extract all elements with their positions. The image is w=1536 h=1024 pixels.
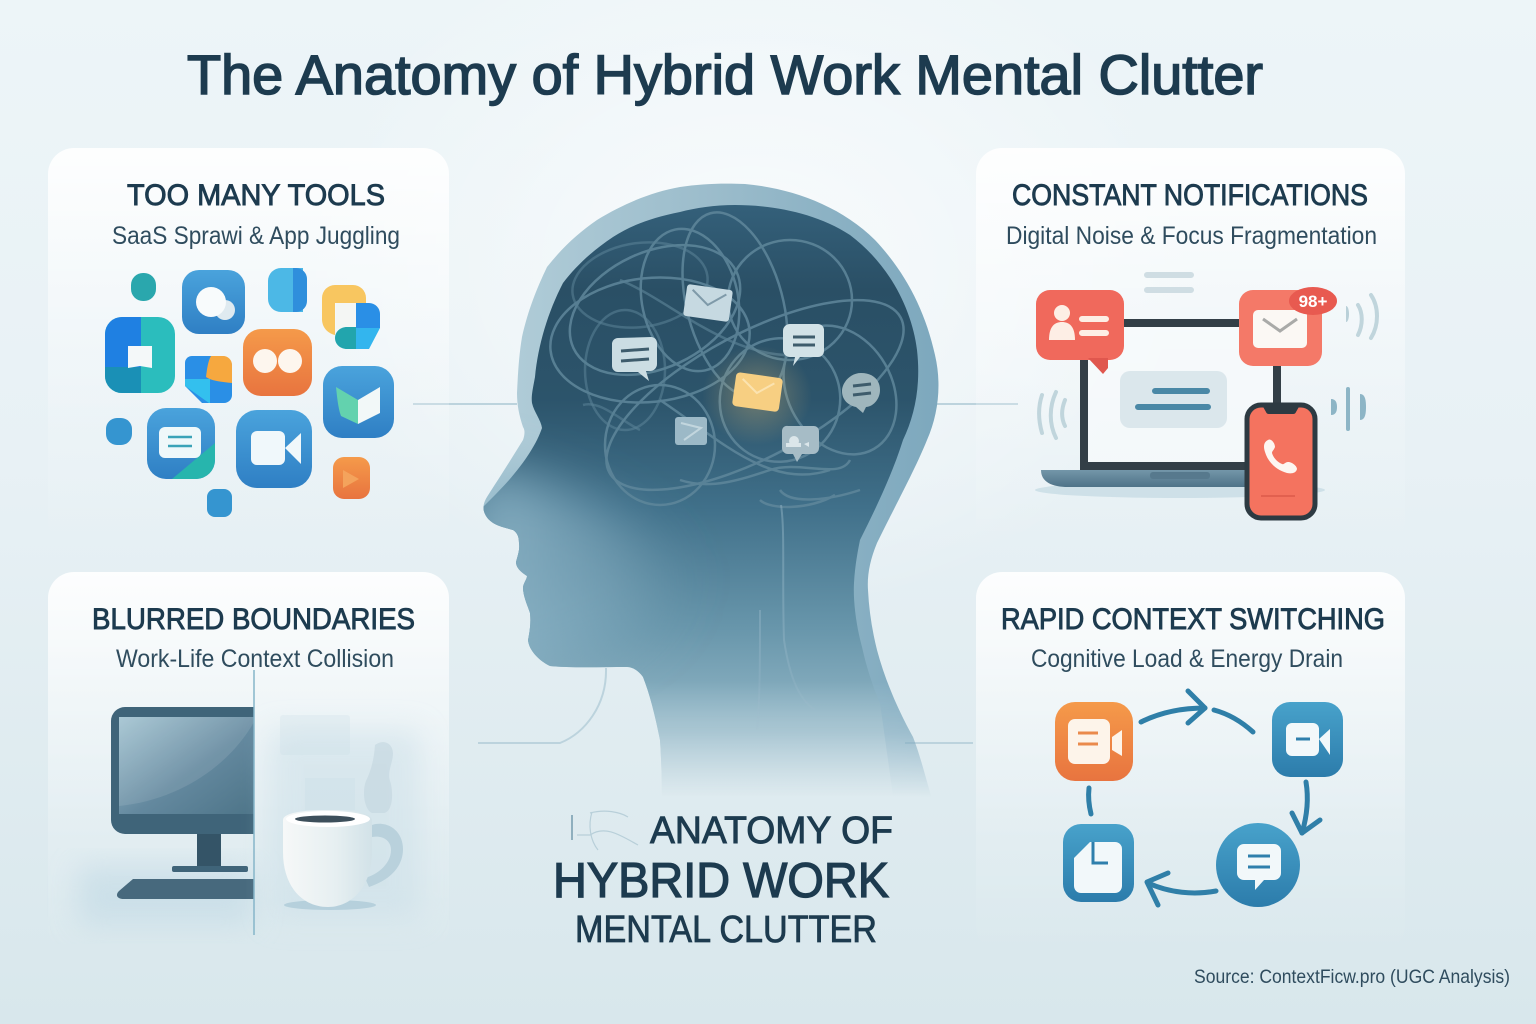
illustration: monitor and keyboard — [78, 707, 254, 926]
illustration: laptop and notifications: 98+ — [1299, 292, 1327, 311]
connector lines — [413, 404, 1018, 743]
source note: Source: ContextFicw.pro (UGC Analysis) — [1194, 966, 1510, 988]
brain glow — [702, 345, 812, 445]
panel: rapid context switching — [976, 572, 1405, 952]
icon: highlighted envelope — [732, 372, 783, 412]
tangled lines — [549, 211, 905, 508]
icon: round chat — [842, 373, 880, 413]
heading: blurred boundaries: BLURRED BOUNDARIES — [92, 603, 415, 636]
heading: too many tools: TOO MANY TOOLS — [127, 179, 385, 212]
title: The Anatomy of Hybrid Work Mental Clutter — [187, 43, 1263, 106]
caption line: anatomy of: ANATOMY OF — [650, 810, 893, 852]
head interior — [470, 205, 918, 810]
faint sketch marks — [572, 811, 638, 850]
subtitle: cognitive load: Cognitive Load & Energy Drain — [1031, 645, 1343, 673]
head silhouette — [484, 184, 938, 790]
heading: rapid context switching: RAPID CONTEXT SWITCHING — [1001, 603, 1385, 636]
icon: chat left — [612, 337, 657, 381]
face shading — [484, 450, 662, 666]
icon: chat bottom — [782, 426, 819, 462]
subtitle: digital noise: Digital Noise & Focus Fragmentation — [1006, 222, 1377, 250]
divider: work-life split — [253, 670, 255, 935]
icon: chat right — [783, 324, 824, 366]
center caption — [553, 810, 893, 951]
subtitle: work-life: Work-Life Context Collision — [116, 645, 394, 673]
head rim — [484, 184, 938, 790]
caption line: mental clutter: MENTAL CLUTTER — [575, 909, 877, 951]
panel: blurred boundaries — [48, 572, 449, 952]
panel: too many tools — [48, 148, 449, 548]
icon: send — [675, 417, 707, 445]
neck nerves — [759, 505, 794, 682]
subtitle: saas sprawl: SaaS Sprawi & App Juggling — [112, 222, 400, 250]
illustration: laptop and notifications — [1035, 275, 1377, 518]
panel: constant notifications — [976, 148, 1405, 548]
heading: constant notifications: CONSTANT NOTIFICATIONS — [1012, 179, 1368, 212]
icon: envelope top — [683, 284, 733, 322]
caption line: hybrid work: HYBRID WORK — [553, 854, 889, 908]
illustration: coffee mug — [270, 715, 420, 920]
cycle diagram — [1055, 691, 1343, 907]
icon cluster: app icons — [105, 268, 394, 517]
